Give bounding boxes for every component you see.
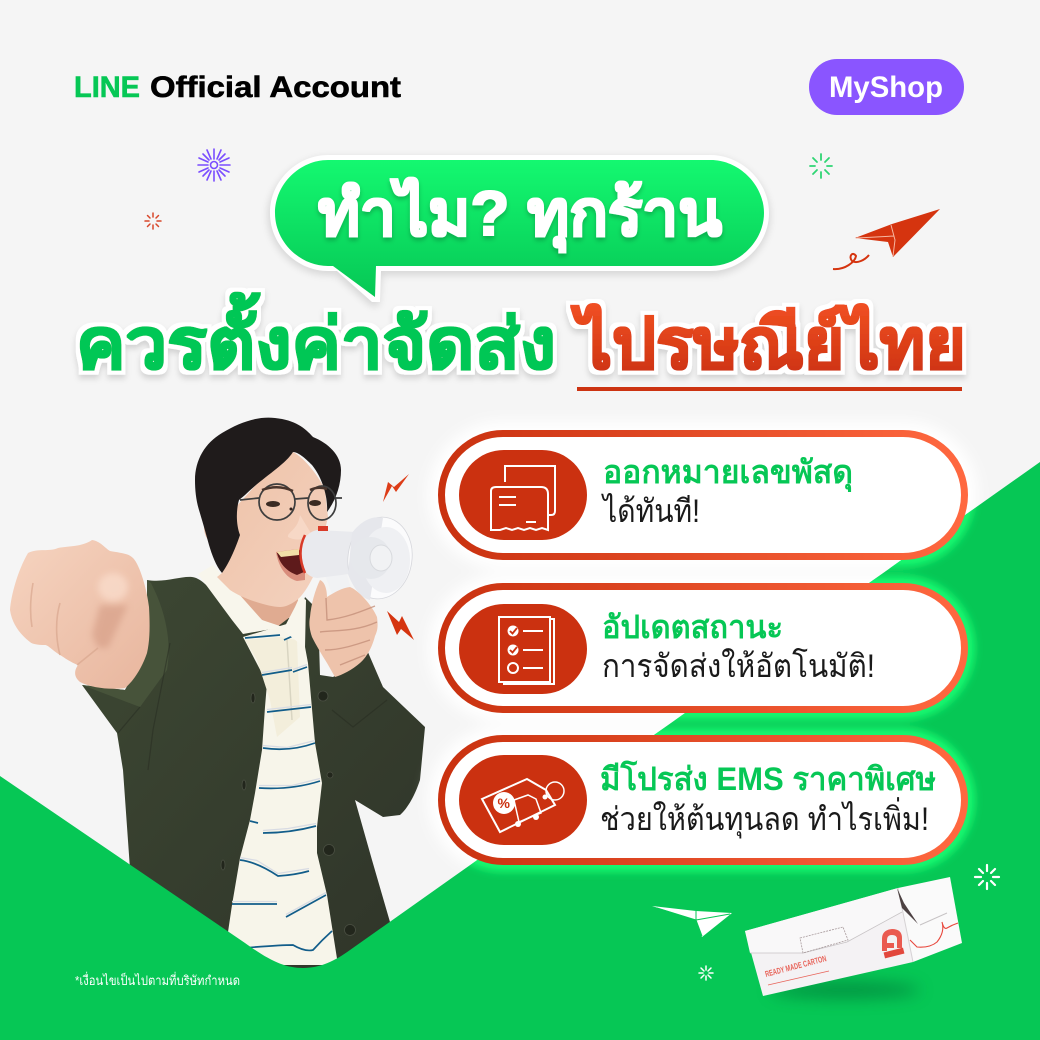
text: อัปเดตสถานะ: [602, 609, 783, 645]
icon: white firework small: [699, 966, 713, 980]
box shadow: [770, 982, 920, 998]
box label text: READY MADE CARTON: [764, 953, 827, 979]
icon: discount tag with truck: [459, 755, 587, 845]
icon: white firework right: [975, 865, 999, 889]
text: มีโปรส่ง EMS ราคาพิเศษ: [600, 760, 936, 797]
speech bubble headline: [268, 155, 770, 306]
headline underline: [577, 387, 962, 391]
logo: LINE Official Account: Official Account: [150, 71, 401, 104]
flap shadow lines: [750, 912, 902, 953]
face: [217, 452, 332, 607]
red headline text: ไปรษณีย์ไทย: [570, 303, 966, 383]
badge: MyShop: MyShop: [829, 71, 943, 104]
green background shape: [0, 462, 1040, 1040]
icon: green firework: [810, 154, 832, 178]
hair: [195, 418, 341, 573]
icon: purple firework: [198, 149, 230, 181]
icon: red paper plane: [833, 209, 940, 269]
text: ออกหมายเลขพัสดุ: [603, 454, 853, 493]
glasses: [240, 484, 342, 520]
box label line: [768, 971, 829, 985]
headline line two: [76, 292, 966, 391]
hand holding megaphone: [309, 580, 378, 677]
nose: [288, 515, 312, 539]
footnote: *เงื่อนไขเป็นไปตามที่บริษัทกำหนด: [75, 971, 240, 988]
pointing hand: [10, 540, 150, 689]
megaphone: [300, 513, 417, 603]
box side: [898, 877, 962, 962]
box front: [745, 888, 913, 996]
text: ช่วยให้ต้นทุนลด ทำไรเพิ่ม!: [600, 797, 929, 839]
ear: [204, 509, 230, 545]
text: การจัดส่งให้อัตโนมัติ!: [602, 648, 875, 684]
cardigan folds: [118, 643, 387, 770]
striped polo shirt: [228, 620, 338, 965]
parcel box: [745, 877, 962, 998]
cardigan buttons: [221, 691, 356, 936]
lightning bolt lower: [387, 611, 414, 640]
cardigan body and sleeves: [82, 577, 425, 975]
panel: EMS promotion: [442, 738, 964, 862]
eyes and brows: [262, 487, 327, 510]
photo: man with megaphone pointing forward: [10, 418, 425, 975]
lightning bolt upper: [383, 474, 409, 502]
text: ได้ทันที!: [600, 493, 700, 529]
box dashed label: [800, 927, 848, 953]
sleeve cuff: [82, 580, 169, 707]
icon: red firework: [145, 213, 161, 229]
glow around pills on green background: [468, 506, 978, 876]
badge: MyShop: [809, 59, 964, 115]
shirt collar: [198, 565, 306, 648]
box top flap: [745, 888, 902, 953]
icon: white paper plane: [652, 906, 732, 937]
neck: [217, 570, 303, 627]
bubble text: ทำไม? ทุกร้าน: [318, 177, 722, 253]
glow around pills on light background: [428, 421, 978, 874]
icon: checklist: [459, 604, 587, 694]
box ribbon: [910, 922, 958, 947]
panel: tracking number: [442, 434, 964, 556]
text: [600, 454, 853, 529]
green headline text: ควรตั้งค่าจัดส่ง: [76, 292, 556, 383]
text: [600, 760, 936, 839]
open mouth: [276, 549, 305, 581]
text: [602, 609, 875, 684]
box logo: [882, 929, 904, 958]
icon: receipts: [459, 450, 587, 540]
panel: status update: [442, 586, 964, 710]
logo: LINE Official Account: LINE: [74, 71, 140, 104]
icon: discount tag with truck: %: [498, 795, 510, 811]
